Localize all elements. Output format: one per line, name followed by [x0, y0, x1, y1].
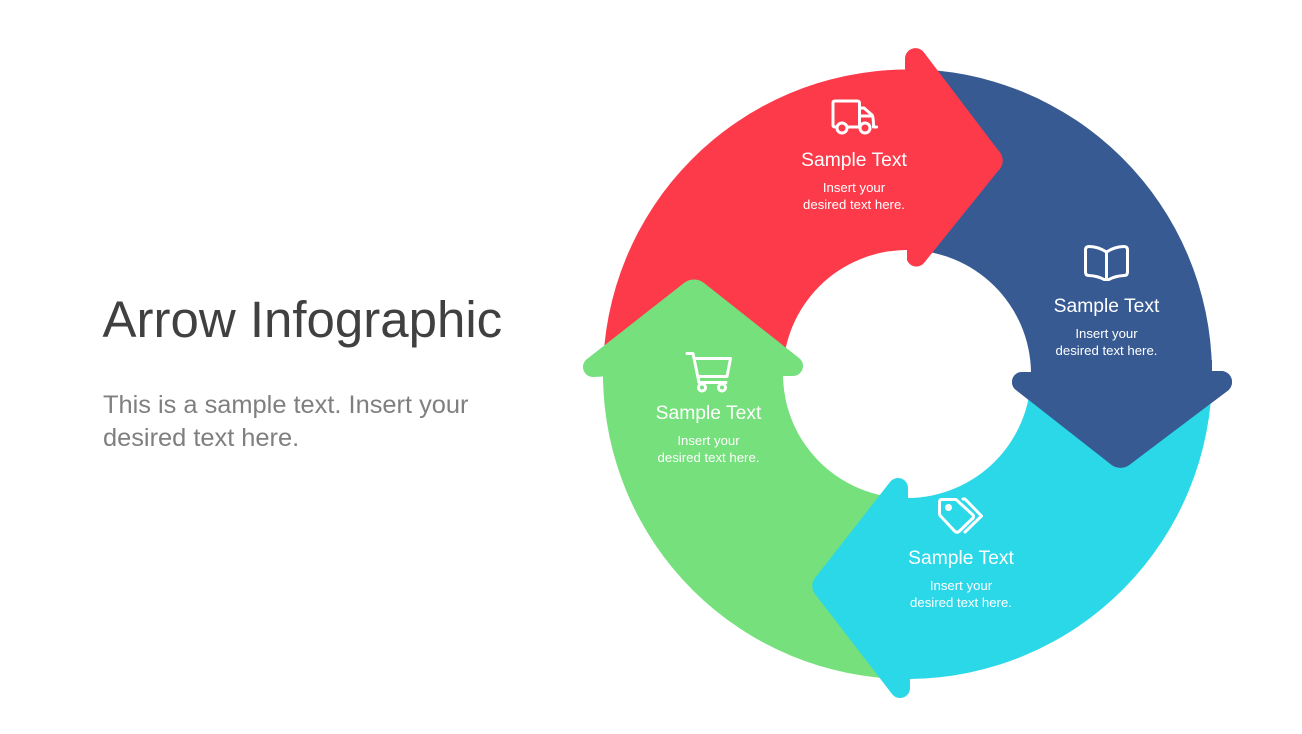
- title: Arrow Infographic: [102, 291, 502, 348]
- arrow: red segment: [603, 48, 1003, 374]
- arrow: cyan segment: [812, 374, 1212, 698]
- arrow: blue segment body: [907, 69, 1232, 468]
- arrow: green segment: [583, 279, 907, 679]
- icon: delivery truck: [833, 101, 876, 133]
- panel: green content: [656, 354, 762, 465]
- panel: red content: [801, 101, 908, 212]
- panel: cyan content: [908, 499, 1015, 610]
- heading: Sample Text: [656, 403, 762, 424]
- body text: desired text here.: [910, 595, 1012, 610]
- icon: open book: [1086, 246, 1128, 280]
- icon: price tags: [940, 499, 982, 532]
- body text: desired text here.: [803, 197, 905, 212]
- icon: shopping cart: [687, 354, 730, 391]
- body text: desired text here.: [658, 450, 759, 465]
- body text: desired text here.: [1056, 343, 1157, 358]
- body text: Insert your: [823, 180, 886, 195]
- body text: Insert your: [930, 578, 993, 593]
- heading: Sample Text: [1054, 296, 1160, 317]
- description text: This is a sample text. Insert your: [103, 391, 469, 419]
- arrowhead: blue: [1012, 360, 1232, 468]
- heading: Sample Text: [801, 150, 908, 171]
- panel: blue content: [1054, 246, 1160, 358]
- heading: Sample Text: [908, 548, 1015, 569]
- body text: Insert your: [1075, 326, 1138, 341]
- body text: Insert your: [677, 433, 740, 448]
- description text: desired text here.: [103, 424, 299, 452]
